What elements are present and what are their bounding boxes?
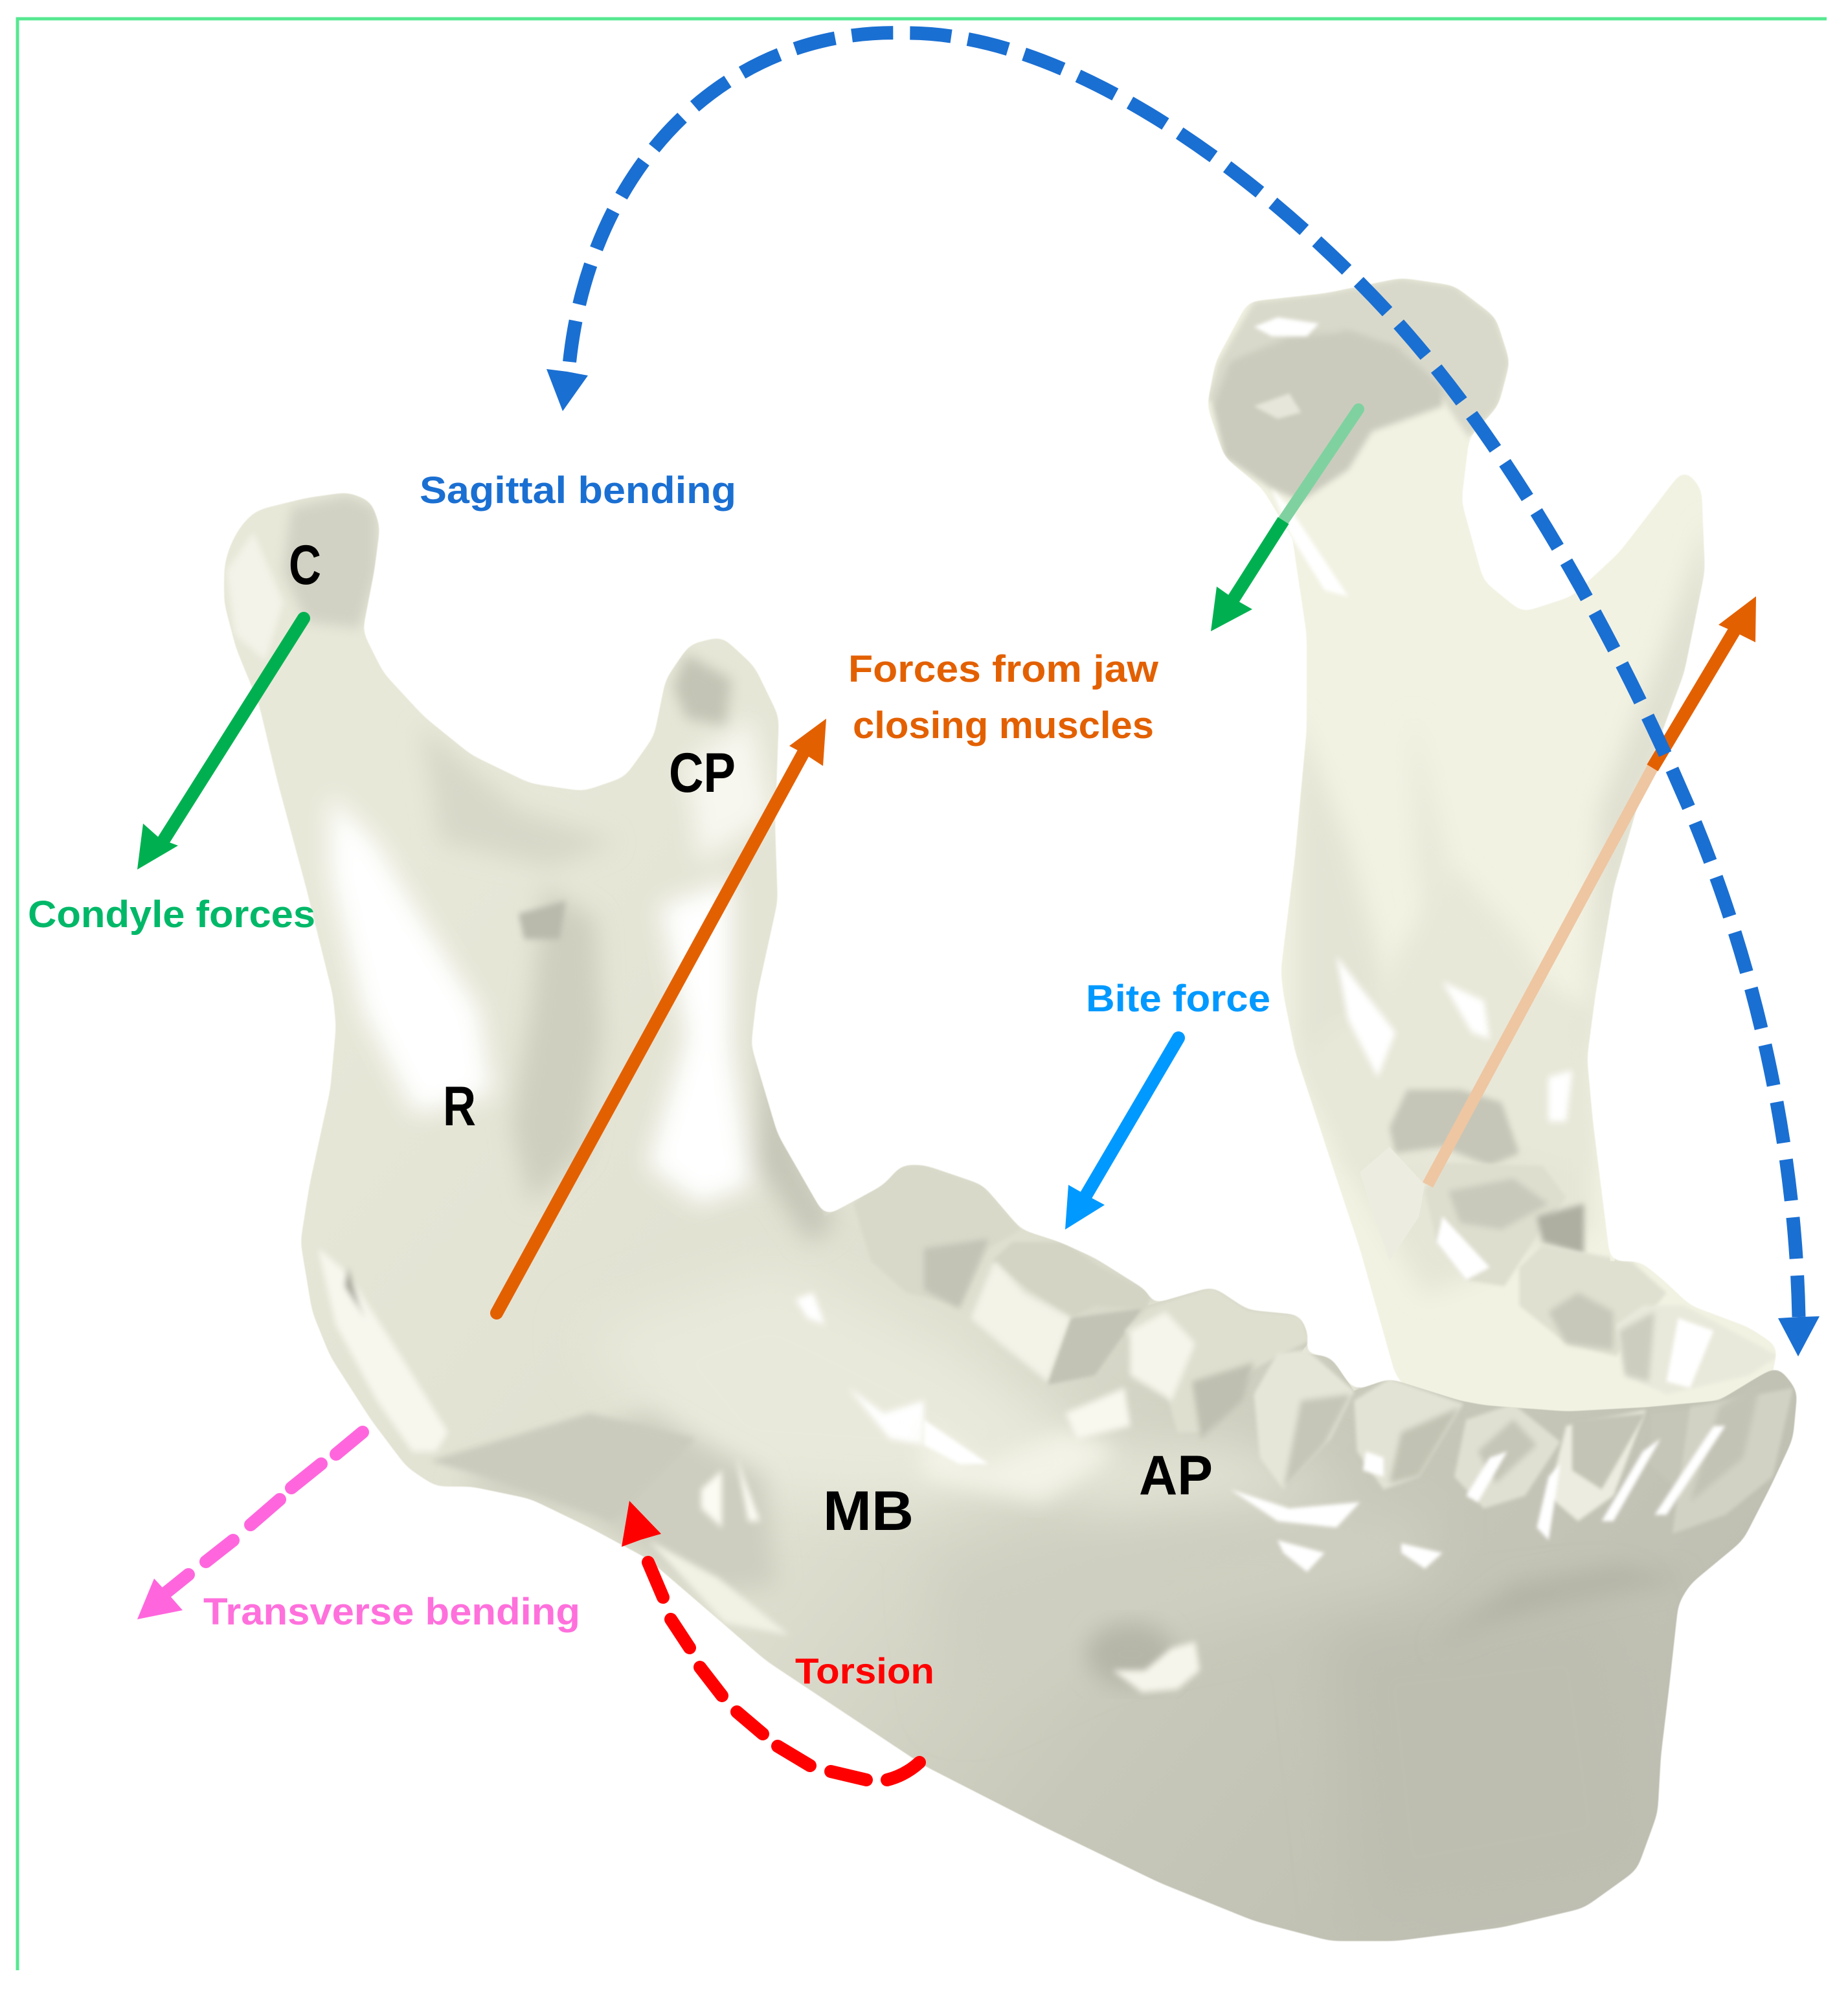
ramus highlights and shadows [330, 796, 492, 1114]
left condyle shading [227, 495, 566, 939]
label: forces from jaw closing muscles: Forces from jaw [848, 648, 1159, 690]
arrow: condyle force far side [1211, 409, 1358, 631]
label: sagittal bending: Sagittal bending [420, 469, 736, 511]
arrow: torsion [622, 1501, 919, 1780]
far ramus of the mandible [1207, 278, 1778, 1489]
arrow: sagittal bending [547, 33, 1820, 1356]
far ramus lower detail and molars [1301, 868, 1778, 1394]
near mandible silhouette [224, 492, 1797, 1941]
gonial angle highlights [318, 1248, 924, 1635]
arrow: condyle force near side [137, 618, 304, 870]
anatomical label: alveolar process: AP [1139, 1444, 1213, 1507]
far condyle head [1207, 278, 1510, 596]
arrow: bite force [1065, 1038, 1178, 1230]
near teeth and alveolar ridge [853, 1165, 1793, 1648]
label: forces from jaw closing muscles: closing muscles [853, 704, 1154, 747]
label: bite force: Bite force [1086, 978, 1270, 1020]
arrow: transverse bending [137, 1432, 363, 1619]
anatomical label: ramus: R [443, 1075, 476, 1138]
arrow: jaw closing force far side [1428, 596, 1756, 1185]
far ramus silhouette [1207, 278, 1778, 1489]
label: forces from jaw closing muscles [848, 648, 1159, 747]
near body and ramus of the mandible [224, 492, 1797, 1941]
label: torsion: Torsion [795, 1650, 934, 1691]
label: transverse bending: Transverse bending [203, 1591, 580, 1633]
anatomical label: coronoid process: CP [669, 742, 736, 804]
anatomical label: mandibular body: MB [823, 1480, 914, 1542]
label: condyle forces: Condyle forces [28, 893, 315, 936]
anatomical label: condyle: C [289, 534, 321, 596]
icon: mental foramen [1086, 1623, 1200, 1692]
arrow: jaw closing force near side [497, 719, 826, 1313]
